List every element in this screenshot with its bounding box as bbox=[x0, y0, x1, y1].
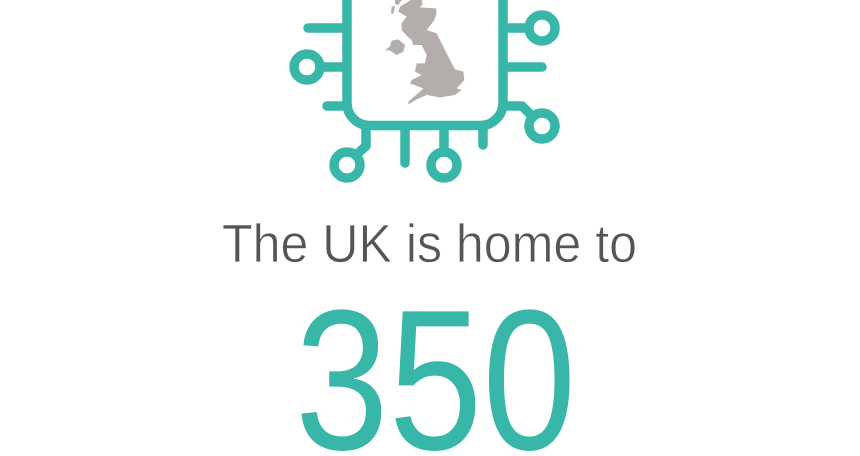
Great Britain bbox=[398, 0, 464, 104]
icon: circuit chip bbox=[294, 0, 555, 178]
left connectors bbox=[294, 28, 345, 106]
bottom connectors bbox=[334, 128, 483, 178]
text: The UK is home to: The UK is home to bbox=[222, 214, 637, 274]
Northern Ireland bbox=[385, 39, 405, 55]
right connectors bbox=[505, 15, 555, 139]
Scottish islands bbox=[391, 0, 402, 14]
icon: UK map bbox=[385, 0, 464, 104]
chip body bbox=[347, 0, 503, 126]
